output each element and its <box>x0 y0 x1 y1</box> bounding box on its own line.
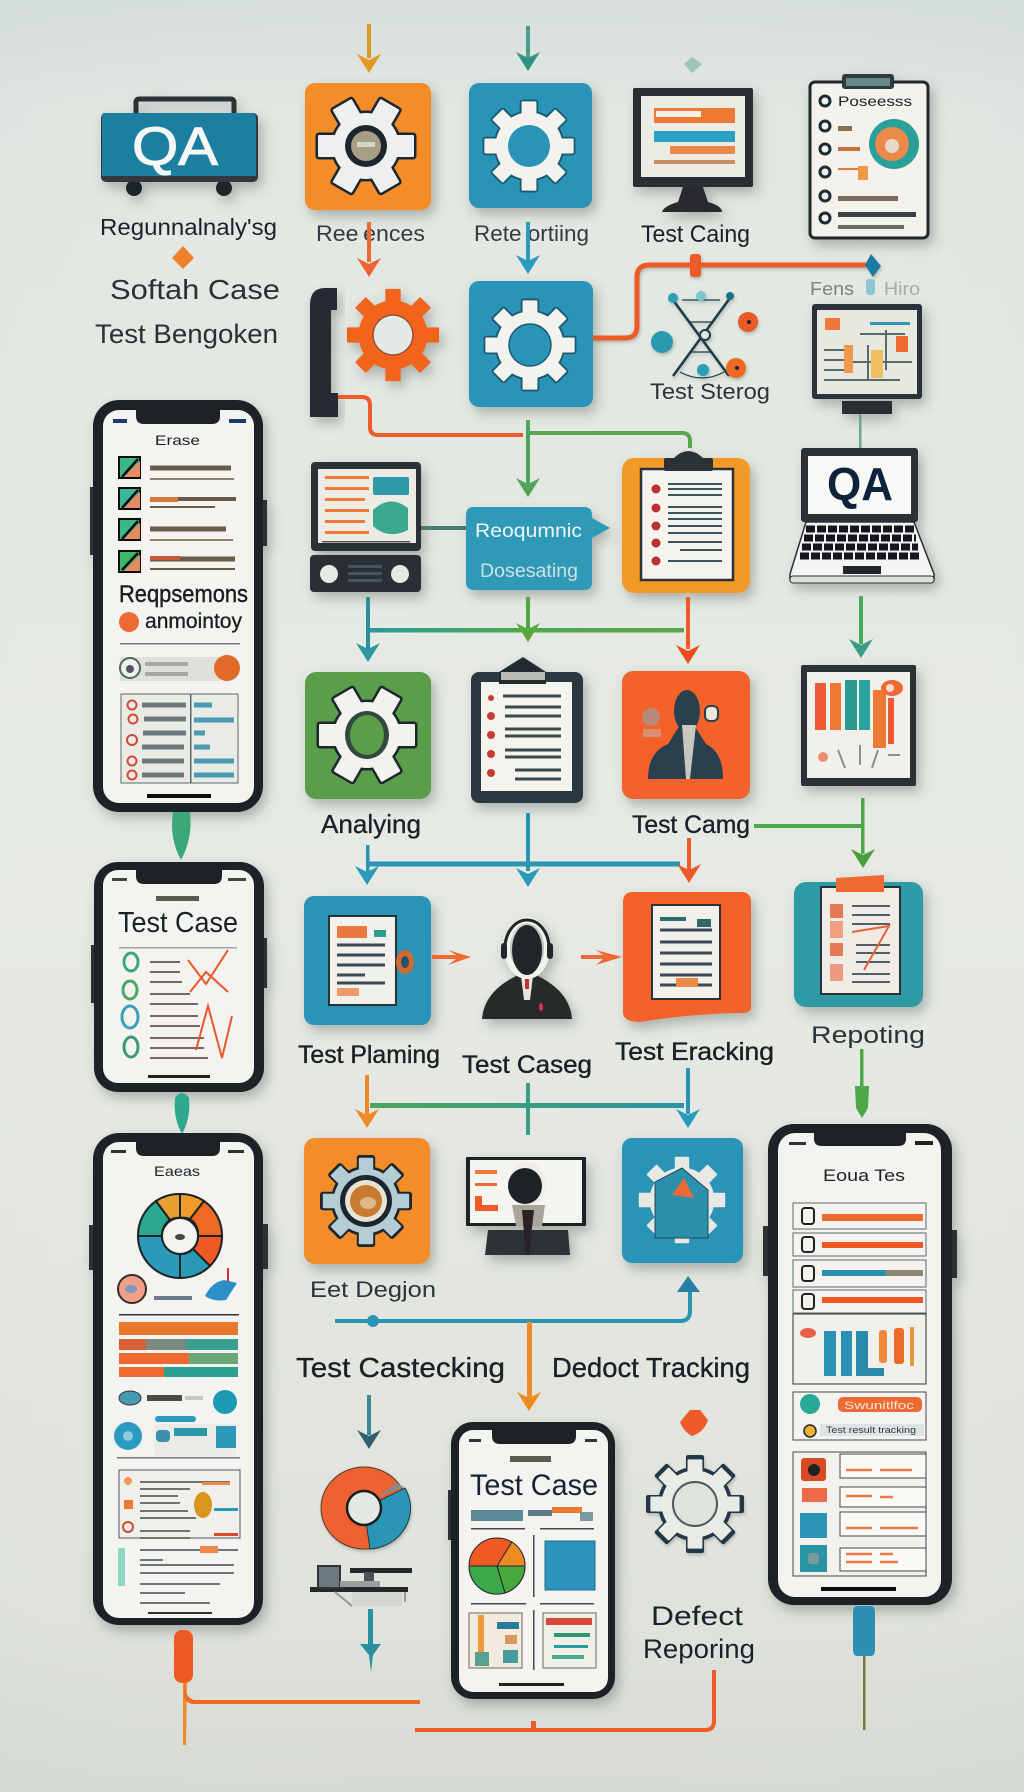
icon: faint diamond <box>684 57 702 73</box>
label: test casetracking: Test Castecking <box>296 1352 505 1383</box>
icon: bench device <box>310 1566 412 1606</box>
panel: laptop QA: QA <box>827 458 893 510</box>
icon: donut chart <box>321 1467 411 1549</box>
panel: requirement label tile: Reoqumnic <box>475 521 582 542</box>
phone one control <box>120 655 240 681</box>
panel: phone two <box>91 862 267 1092</box>
connector: green split row <box>355 1068 700 1135</box>
label: test cases: Test Caseg <box>462 1051 592 1079</box>
panel: clipboard progress <box>810 74 928 238</box>
label: defect: Defect <box>651 1601 744 1631</box>
connector: split arrows row three <box>356 597 700 664</box>
label: test bengoken: Test Bengoken <box>95 319 278 349</box>
panel: dark clipboard <box>471 657 583 803</box>
phone five heading: Test Case <box>470 1469 598 1502</box>
label: test strategy: Test Sterog <box>650 379 770 404</box>
arrow: blue down row one <box>516 222 540 274</box>
phone three report one <box>119 1470 240 1538</box>
phone five blue square <box>545 1541 595 1590</box>
phone three bars <box>119 1322 238 1377</box>
panel: blue document tile <box>304 896 431 1025</box>
panel: blue gear tile second <box>469 281 593 407</box>
label: test design: Eet Degjon <box>310 1277 436 1302</box>
arrow: orange down row one <box>357 222 381 277</box>
phone four summary box: Test result tracking <box>826 1425 916 1435</box>
label: test tracking: Test Eracking <box>615 1038 774 1066</box>
connector: blue split row <box>355 813 701 887</box>
connector: green to reporting <box>754 798 875 868</box>
panel: blue gear tile top <box>469 83 592 208</box>
panel: requirement label tile <box>466 507 610 590</box>
phone four table <box>793 1452 926 1576</box>
panel: monitor test plan <box>633 88 753 212</box>
connector: orange to diamond <box>593 254 881 338</box>
connector: orange capsule left <box>174 1630 420 1745</box>
label: requirement analysis: Regunnalnaly'sg <box>100 214 277 240</box>
label: reporting: Repoting <box>811 1022 925 1049</box>
label: defect tracking: Dedoct Tracking <box>552 1352 750 1383</box>
panel: teal clipboard tile <box>794 875 923 1007</box>
connector: orange bottom <box>415 1670 714 1732</box>
arrow: teal pin <box>360 1609 381 1672</box>
arrow: teal down top <box>516 26 540 71</box>
icon: QA sign: QA <box>132 117 218 177</box>
panel: requirement label tile: Dosesating <box>480 561 578 582</box>
label: reporting two: Reporing <box>643 1634 755 1664</box>
phone one checklist <box>119 457 236 572</box>
panel: phone four <box>763 1124 957 1605</box>
label: test casing two: Test Camg <box>632 811 750 839</box>
icon: network diagram <box>651 291 758 378</box>
label: reporting: Rete ortiing <box>474 221 589 246</box>
phone three blue widgets <box>114 1390 240 1458</box>
icon: person with headset <box>482 920 572 1019</box>
label: analyzing: Analying <box>321 809 421 839</box>
phone one subheading: anmointoy <box>145 610 242 633</box>
panel: orange clipboard tile <box>622 451 750 593</box>
panel: orange person tile <box>622 671 750 799</box>
arrow: dark teal down <box>357 1395 381 1449</box>
icon: orange diamond <box>172 246 194 269</box>
panel: green gear tile <box>305 672 431 799</box>
panel: laptop QA <box>790 448 934 583</box>
panel: monitor with person <box>466 1157 586 1255</box>
arrow: to person <box>432 950 471 965</box>
phone one title: Erase <box>155 432 200 448</box>
panel: bar chart card <box>801 665 916 786</box>
icon: orange gear <box>347 289 439 381</box>
connector: green capsule <box>172 812 191 860</box>
arrow: from person <box>581 950 622 965</box>
icon: outline gear <box>647 1456 743 1552</box>
phone two heading: Test Case <box>118 907 238 939</box>
phone three title: Eaeas <box>154 1163 200 1179</box>
phone two checklist chart <box>119 947 237 1058</box>
connector: teal capsule <box>175 1093 189 1134</box>
arrow: orange down top <box>357 24 381 73</box>
arrow: green to phone four <box>855 1049 869 1118</box>
phone four bar chart <box>793 1314 926 1384</box>
connector: orange to green split <box>338 397 690 497</box>
phone three icons <box>118 1268 239 1316</box>
phone four title: Eoua Tes <box>823 1166 905 1185</box>
icon: orange small widget <box>680 1410 708 1436</box>
panel: phone five <box>448 1422 615 1699</box>
label: faint feature: Hiro <box>884 279 920 299</box>
arrow: green to chart <box>849 596 873 658</box>
label: test planning: Test Plaming <box>298 1041 440 1069</box>
connector: blue with up arrow and orange down <box>335 1276 700 1411</box>
label: test casing: Test Caing <box>641 221 750 248</box>
phone five thumbnail two <box>543 1613 596 1668</box>
label: software case: Softah Case <box>110 274 280 305</box>
phone five thumbnail one <box>469 1613 522 1668</box>
label: faint feature <box>810 279 920 299</box>
panel: blue broken gear tile <box>622 1138 743 1263</box>
panel: monitor diagram <box>812 304 922 414</box>
phone five strip <box>471 1507 593 1521</box>
icon: QA sign <box>101 99 258 196</box>
label: requirements: Ree ences <box>316 221 425 246</box>
panel: orange document tile <box>623 892 751 1022</box>
phone five pie <box>469 1538 525 1594</box>
panel: orange gear tile lower <box>304 1138 430 1264</box>
phone four summary box <box>793 1392 926 1440</box>
phone three report two <box>118 1546 238 1614</box>
phone three ring chart <box>138 1194 222 1278</box>
connector: device to label <box>421 526 467 530</box>
panel: phone one <box>90 400 267 812</box>
phone four progress rows <box>793 1203 926 1313</box>
panel: phone three <box>89 1133 268 1625</box>
phone four summary box: Swunitlfoc <box>844 1400 915 1412</box>
panel: orange gear tile <box>305 83 431 210</box>
connector: blue plug <box>853 1606 875 1730</box>
icon: dark bar <box>310 288 338 417</box>
connector: thin green to laptop <box>859 414 862 450</box>
phone one heading: Reqpsemons <box>119 581 248 608</box>
phone one table <box>121 694 238 783</box>
panel: device screen with console <box>310 462 421 592</box>
panel: clipboard progress: Poseesss <box>838 93 912 109</box>
label: faint feature: Fens <box>810 279 854 299</box>
